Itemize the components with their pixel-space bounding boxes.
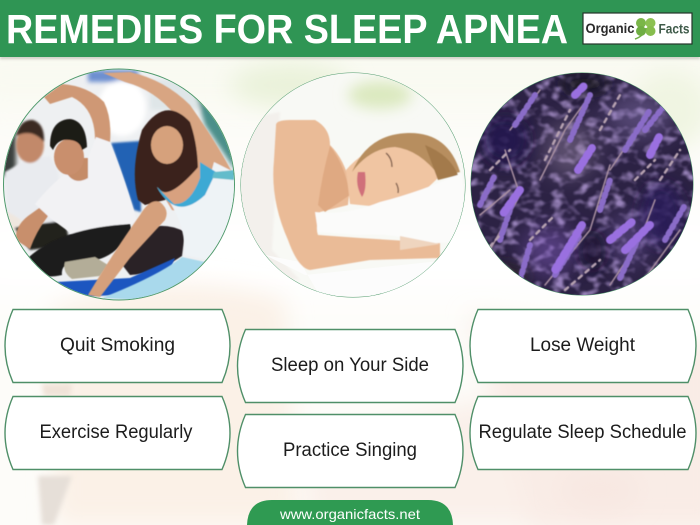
remedy box: Lose Weight: Lose Weight xyxy=(530,335,636,356)
remedy box: Practice Singing: Practice Singing xyxy=(283,440,417,461)
remedy box: Quit Smoking: Quit Smoking xyxy=(60,335,175,356)
photo circle: woman sleeping xyxy=(240,70,470,300)
woman xyxy=(88,72,235,300)
foreground man xyxy=(16,84,185,279)
footer pill: website xyxy=(247,500,453,525)
icon: clover xyxy=(635,18,656,39)
logo: Organic Facts: Organic xyxy=(586,21,635,36)
remedy box: Exercise Regularly xyxy=(5,396,230,470)
remedy box: Sleep on Your Side: Sleep on Your Side xyxy=(271,355,429,376)
mat xyxy=(56,258,175,297)
remedy box: Practice Singing xyxy=(238,414,463,488)
remedy box: Exercise Regularly: Exercise Regularly xyxy=(40,422,193,443)
remedy box: Regulate Sleep Schedule xyxy=(470,396,696,470)
photo circle: lavender xyxy=(470,72,695,297)
remedy box: Lose Weight xyxy=(470,310,696,382)
remedy box: Sleep on Your Side xyxy=(238,330,463,402)
remedy box: Regulate Sleep Schedule: Regulate Sleep Schedule xyxy=(478,422,686,443)
remedy box: Quit Smoking xyxy=(5,310,230,382)
background man xyxy=(5,120,70,250)
footer pill: website: www.organicfacts.net xyxy=(279,506,420,522)
header banner xyxy=(0,0,700,59)
logo: Organic Facts xyxy=(583,13,692,44)
title: REMEDIES FOR SLEEP APNEA xyxy=(6,6,568,52)
photo circle: group exercise xyxy=(0,65,240,305)
logo: Organic Facts: Facts xyxy=(658,22,690,36)
